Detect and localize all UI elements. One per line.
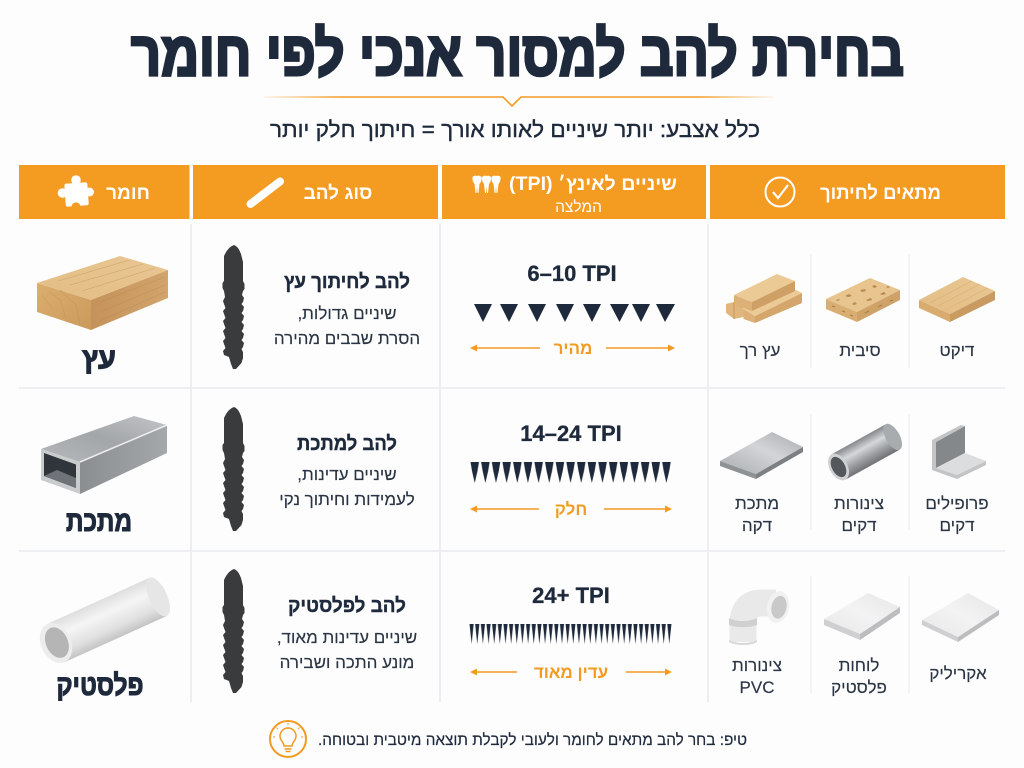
icon: blade — [250, 182, 280, 204]
suitable: plastic sheets: לוחות — [839, 656, 879, 675]
footer tip — [270, 721, 747, 757]
blade icon: wood — [222, 245, 244, 369]
suitable: chipboard — [826, 278, 900, 360]
title divider — [264, 97, 773, 106]
TPI value: plastic: 24+ TPI — [532, 583, 610, 608]
material name: plastic: פלסטיק — [56, 670, 144, 702]
suitable: acrylic: אקריליק — [929, 664, 987, 683]
material: white plastic pipe — [34, 574, 175, 668]
suitable: plastic sheets: פלסטיק — [831, 678, 887, 697]
blade description: wood: הסרת שבבים מהירה — [274, 329, 420, 348]
header cell: blade type — [193, 165, 438, 219]
TPI value: wood: 6–10 TPI — [527, 261, 617, 286]
suitable: thin metal sheet — [720, 432, 803, 535]
suitable: plywood — [919, 277, 995, 360]
suitable: thin metal sheet: דקה — [742, 516, 772, 535]
suitable: thin pipes — [824, 421, 906, 535]
material: wood block — [37, 256, 168, 330]
blade description: metal — [279, 433, 415, 509]
header cell: suitable for cutting — [710, 165, 1005, 219]
suitable: thin profiles: פרופילים — [925, 494, 989, 513]
title: בחירת להב למסור אנכי לפי חומר — [131, 20, 904, 89]
tip text: טיפ: בחר להב מתאים לחומר ולעובי לקבלת תוצאה מיטבית ובטוחה. — [318, 731, 747, 749]
TPI value: metal: 14–24 TPI — [520, 421, 622, 446]
blade icon: metal — [222, 407, 244, 531]
header cell: blade type: סוג להב — [304, 183, 372, 204]
icon: teeth — [472, 176, 501, 193]
suitable: PVC pipes — [729, 589, 792, 697]
header cell: teeth per inch: המלצה — [555, 199, 602, 216]
material name: wood: עץ — [82, 343, 116, 375]
suitable: PVC pipes: PVC — [740, 678, 774, 697]
speed label with arrows: very fine — [470, 663, 672, 682]
icon: puzzle piece — [58, 175, 94, 212]
suitable: thin profiles — [925, 425, 989, 535]
row: plastic — [34, 569, 999, 702]
icon: check mark — [766, 178, 794, 206]
header cell: teeth per inch: שיניים לאינץ׳ (TPI) — [509, 174, 677, 195]
blade description: wood: שיניים גדולות, — [297, 304, 397, 323]
row: wood — [37, 245, 995, 375]
teeth: very fine — [469, 624, 672, 644]
teeth: coarse — [474, 304, 675, 322]
blade description: metal: להב למתכת — [297, 433, 397, 455]
suitable: PVC pipes: צינורות — [732, 656, 782, 675]
speed label with arrows: very fine: עדין מאוד — [534, 663, 608, 682]
blade description: metal: שיניים עדינות, — [297, 465, 397, 484]
icon: light bulb — [270, 721, 306, 757]
blade description: plastic — [277, 595, 417, 672]
suitable: acrylic — [922, 593, 999, 683]
blade description: plastic: להב לפלסטיק — [288, 595, 406, 617]
row: metal — [41, 407, 989, 538]
speed label with arrows: smooth — [470, 500, 672, 519]
blade description: plastic: מונע התכה ושבירה — [280, 653, 414, 672]
material: steel rectangular tube — [41, 416, 167, 494]
suitable: plywood: דיקט — [940, 341, 974, 360]
speed label with arrows: smooth: חלק — [555, 500, 587, 519]
suitable: chipboard: סיבית — [839, 341, 881, 360]
material name: metal: מתכת — [66, 506, 132, 538]
blade description: metal: לעמידות וחיתוך נקי — [279, 490, 415, 509]
speed label with arrows: fast: מהיר — [554, 339, 592, 358]
teeth: fine — [470, 462, 672, 483]
suitable: thin metal sheet: מתכת — [735, 494, 779, 513]
header cell: material: חומר — [106, 183, 150, 204]
header cell: material — [19, 165, 190, 219]
suitable: softwood lumber: עץ רך — [740, 341, 781, 360]
suitable: thin profiles: דקים — [939, 516, 975, 535]
suitable: plastic sheets — [824, 593, 900, 697]
subtitle: rule of thumb: כלל אצבע: יותר שיניים לאותו אורך = חיתוך חלק יותר — [270, 117, 760, 142]
suitable: thin pipes: דקים — [841, 516, 877, 535]
suitable: softwood lumber — [726, 274, 802, 360]
blade icon: plastic — [222, 569, 244, 693]
suitable: thin pipes: צינורות — [834, 494, 884, 513]
blade description: wood: להב לחיתוך עץ — [284, 271, 410, 293]
header cell: teeth per inch — [442, 165, 706, 219]
blade description: wood — [274, 271, 420, 348]
table header — [19, 165, 1005, 219]
speed label with arrows: fast — [470, 339, 675, 358]
blade description: plastic: שיניים עדינות מאוד, — [277, 628, 417, 647]
header cell: suitable for cutting: מתאים לחיתוך — [820, 183, 941, 204]
